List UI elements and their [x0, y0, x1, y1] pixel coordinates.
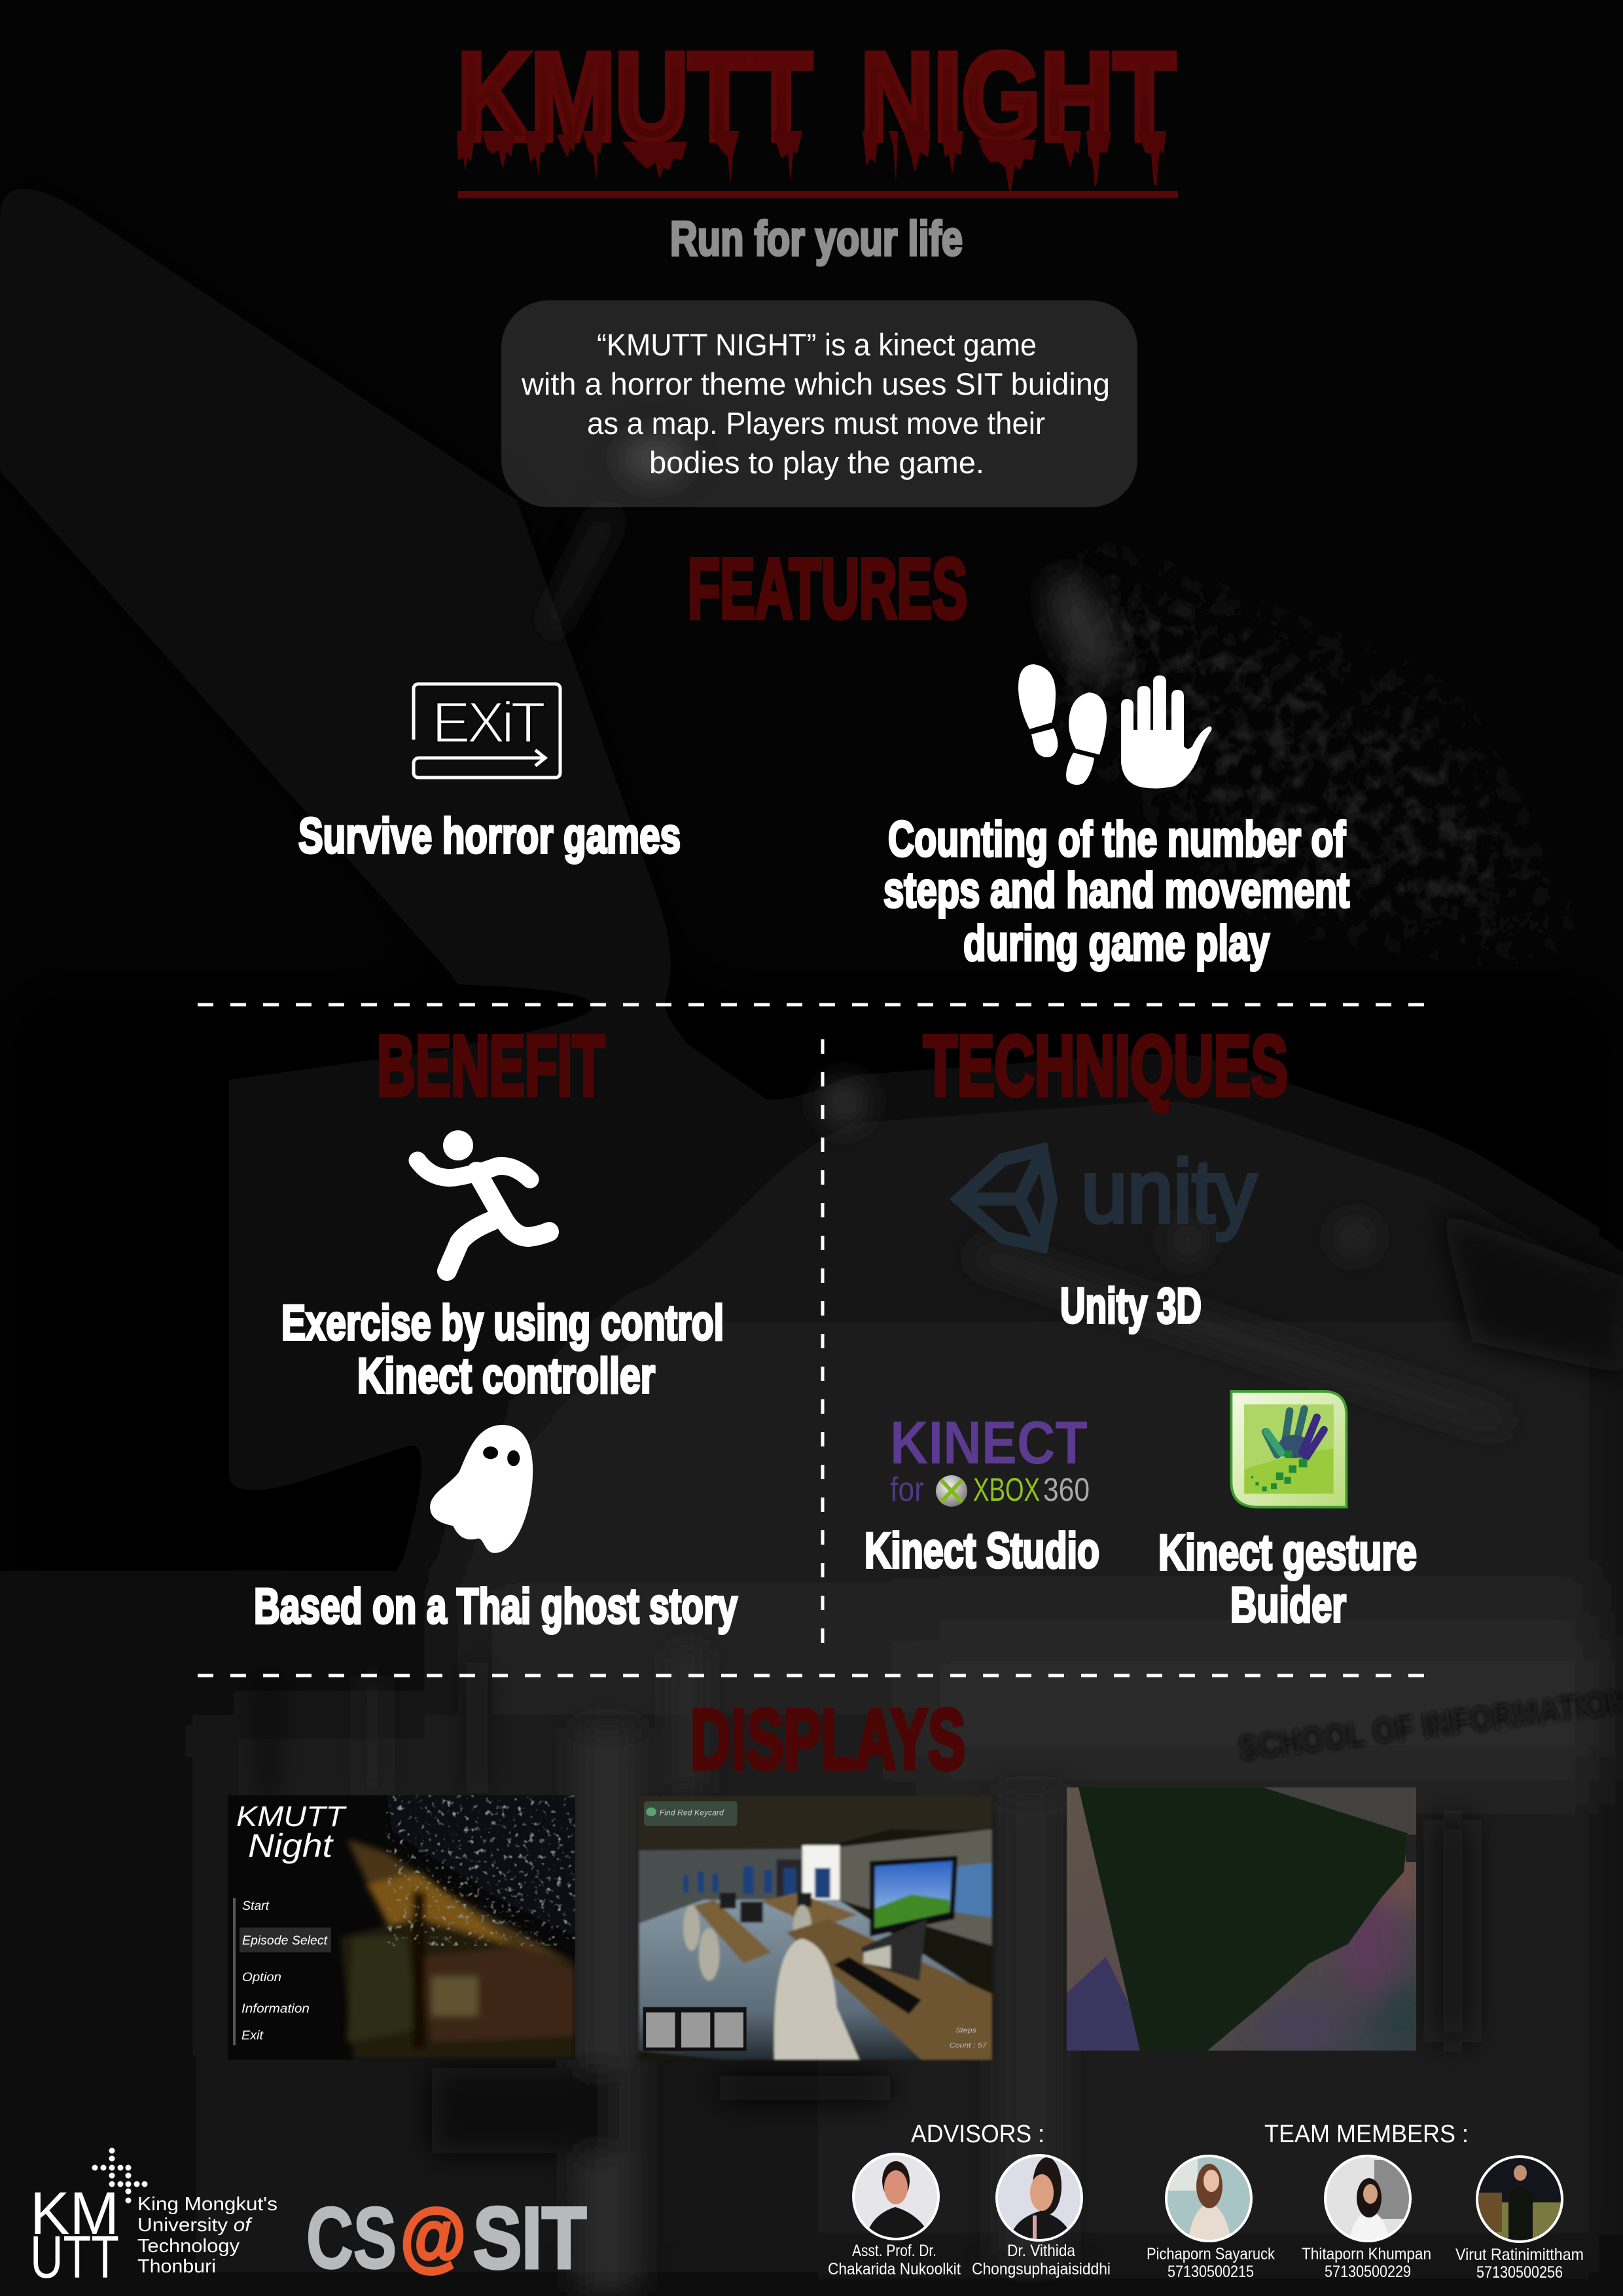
- text: kinect gesture builder: Kinect gesture: [1158, 1525, 1417, 1581]
- text: advisor names: [828, 2242, 1111, 2278]
- screenshot: main menu: Start: [242, 1899, 270, 1913]
- portrait: member 3: [1476, 2155, 1564, 2245]
- heading: benefit: BENEFIT: [377, 1018, 605, 1113]
- heading: techniques: TECHNIQUES: [923, 1018, 1288, 1113]
- text: kinect gesture builder: [1158, 1525, 1417, 1633]
- icon: exit sign: EXiT: [432, 690, 546, 755]
- text: advisor names: Asst. Prof. Dr.: [852, 2242, 936, 2260]
- icon: footprints and hand: [1018, 664, 1212, 789]
- icon: kinect for xbox logo: KINECT: [890, 1408, 1088, 1477]
- panel: description: bodies to play the game.: [649, 445, 984, 480]
- portrait: member 1: [1165, 2155, 1253, 2245]
- icon: kinect for xbox logo: 360: [1043, 1471, 1090, 1508]
- title: KMUTT NIGHT with dripping letters: KMUTT: [457, 27, 812, 166]
- heading: team members: TEAM MEMBERS :: [1264, 2121, 1469, 2148]
- foliage texture: [1047, 556, 1571, 949]
- title: KMUTT NIGHT with dripping letters: NIGHT: [861, 27, 1175, 166]
- text: counting steps and hand movement: steps and hand movement: [883, 863, 1349, 918]
- portrait: member 2: [1324, 2155, 1414, 2245]
- text: team member names: Thitaporn Khumpan: [1302, 2245, 1431, 2263]
- title: KMUTT NIGHT with dripping letters: [457, 27, 1175, 190]
- screenshot: main menu: Option: [242, 1971, 281, 1984]
- logo: KMUTT: [30, 2148, 277, 2291]
- text: exercise benefit: Exercise by using control: [281, 1295, 724, 1351]
- logo: CS@SIT: [306, 2190, 586, 2287]
- icon: ghost: [430, 1425, 533, 1553]
- logo: KMUTT: Thonburi: [137, 2256, 216, 2277]
- logo: CS@SIT: CS: [306, 2190, 397, 2287]
- icon: unity logo: unity: [1081, 1141, 1257, 1241]
- logo: CS@SIT: @: [401, 2193, 466, 2278]
- text: advisor names: Chongsuphajaisiddhi: [972, 2260, 1111, 2278]
- screenshot: main menu: Night: [248, 1827, 334, 1864]
- text: team member names: 57130500229: [1325, 2263, 1411, 2281]
- logo: KMUTT: KM: [30, 2180, 119, 2247]
- text: counting steps and hand movement: during game play: [963, 916, 1270, 971]
- screenshot: computer lab: Count : 57: [950, 2041, 987, 2049]
- text: team member names: Virut Ratinimittham: [1455, 2246, 1584, 2264]
- icon: kinect gesture builder: [1231, 1391, 1346, 1507]
- panel: description: [501, 300, 1137, 507]
- icon: kinect for xbox logo: [890, 1408, 1090, 1509]
- icon: kinect for xbox logo: XBOX: [973, 1471, 1040, 1508]
- logo: KMUTT: King Mongkut's: [137, 2194, 277, 2215]
- text: kinect gesture builder: Buider: [1230, 1577, 1346, 1633]
- logo: CS@SIT: SIT: [473, 2190, 586, 2287]
- screenshot: main menu: Information: [241, 2002, 310, 2016]
- screenshot: lockers: [1067, 1787, 1440, 2055]
- logo: KMUTT: University of: [137, 2215, 253, 2236]
- text: team member names: 57130500256: [1476, 2263, 1563, 2282]
- text: counting steps and hand movement: Counting of the number of: [888, 812, 1346, 867]
- heading: advisors: ADVISORS :: [911, 2121, 1044, 2148]
- text: survive horror games: Survive horror games: [298, 808, 681, 864]
- heading: displays: DISPLAYS: [690, 1691, 965, 1787]
- heading: features: FEATURES: [688, 541, 967, 636]
- screenshot: main menu: Exit: [241, 2029, 264, 2043]
- screenshot: main menu: KMUTT: [236, 1801, 347, 1833]
- text: ghost story benefit: Based on a Thai ghost story: [254, 1579, 738, 1634]
- panel: description: “KMUTT NIGHT” is a kinect game: [597, 327, 1037, 362]
- text: counting steps and hand movement: [883, 812, 1349, 971]
- logo: KMUTT: UTT: [30, 2224, 119, 2291]
- screenshot: computer lab: Find Red Keycard: [660, 1808, 724, 1817]
- icon: kinect for xbox logo: for: [890, 1471, 924, 1509]
- screenshot: main menu: Episode Select: [242, 1934, 328, 1948]
- icon: exit sign: [414, 684, 560, 778]
- title underline: [458, 191, 1178, 198]
- text: exercise benefit: Kinect controller: [357, 1348, 655, 1404]
- screenshot: main menu: [228, 1795, 575, 2060]
- text: team member names: [1147, 2245, 1584, 2282]
- icon: runner: [418, 1130, 549, 1271]
- text: exercise benefit: [281, 1295, 724, 1404]
- portrait: advisor 1: [851, 2153, 942, 2242]
- icon: unity logo: [959, 1141, 1257, 1246]
- text: kinect studio: Kinect Studio: [865, 1523, 1099, 1579]
- text: team member names: 57130500215: [1168, 2263, 1254, 2281]
- text: unity 3d: Unity 3D: [1060, 1278, 1202, 1334]
- screenshot: computer lab: Steps: [955, 2026, 976, 2034]
- text: advisor names: Chakarida Nukoolkit: [828, 2260, 961, 2278]
- portrait: advisor 2: [995, 2153, 1086, 2243]
- tagline: Run for your life: [670, 211, 963, 266]
- text: advisor names: Dr. Vithida: [1007, 2242, 1075, 2260]
- panel: description: with a horror theme which uses SIT buiding: [521, 367, 1110, 401]
- screenshot: computer lab: [639, 1796, 993, 2060]
- logo: KMUTT: Technology: [137, 2236, 240, 2257]
- panel: description: as a map. Players must move their: [587, 406, 1045, 440]
- text: team member names: Pichaporn Sayaruck: [1147, 2245, 1275, 2263]
